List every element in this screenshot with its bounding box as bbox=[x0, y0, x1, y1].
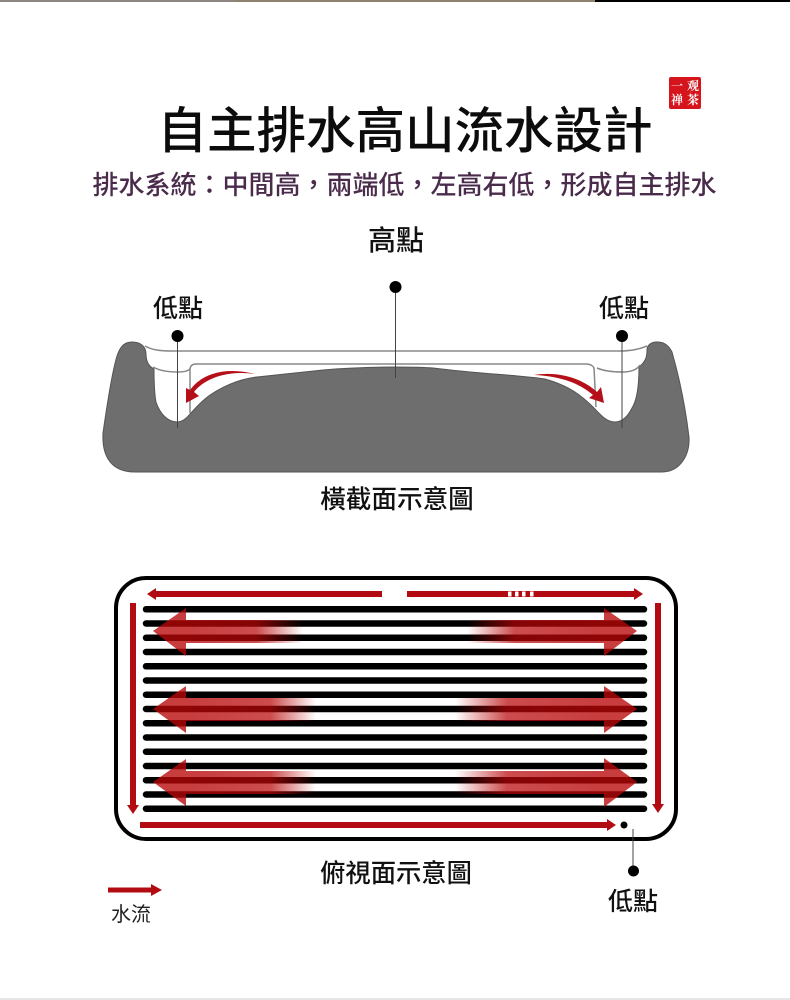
channel arrow: top right bbox=[407, 588, 643, 600]
cross-section diagram bbox=[103, 281, 689, 472]
right drain marker bbox=[616, 330, 628, 428]
channel arrow: left side bbox=[127, 603, 139, 814]
bottom edge strip bbox=[0, 998, 790, 1000]
left drain marker bbox=[172, 330, 184, 428]
wide arrows pointing right bbox=[455, 608, 637, 807]
seal stamp: 茶 bbox=[687, 91, 699, 108]
high point marker bbox=[390, 281, 402, 378]
top view diagram bbox=[116, 578, 676, 839]
subtitle: 排水系統：中間高，兩端低，左高右低，形成自主排水 bbox=[92, 170, 717, 200]
channel arrow: right side bbox=[652, 603, 664, 813]
seal stamp: 禅 bbox=[671, 91, 683, 108]
label: high point: 高點 bbox=[368, 225, 424, 256]
channel arrow: bottom bbox=[140, 819, 616, 831]
label: left low point: 低點 bbox=[153, 295, 203, 323]
channel arrow: top left bbox=[147, 588, 382, 600]
seal stamp bbox=[669, 77, 701, 109]
tray body bbox=[103, 342, 689, 472]
drain hole bbox=[620, 822, 628, 828]
label: bottom low point: 低點 bbox=[608, 888, 658, 916]
wide arrows pointing left bbox=[153, 608, 316, 806]
caption: cross section: 橫截面示意圖 bbox=[320, 485, 474, 514]
title: 自主排水高山流水設計 bbox=[158, 104, 652, 159]
top edge strip bbox=[0, 0, 790, 2]
seal stamp: 一 bbox=[671, 77, 683, 94]
seal stamp: 观 bbox=[687, 77, 699, 94]
tray outline bbox=[116, 578, 676, 839]
low point callout line bbox=[628, 829, 639, 876]
right water arrow bbox=[534, 374, 604, 403]
legend: water flow: 水流 bbox=[111, 903, 151, 926]
drainage slats bbox=[146, 609, 644, 809]
legend: water flow bbox=[108, 884, 162, 926]
left water arrow bbox=[186, 371, 255, 403]
label: right low point: 低點 bbox=[599, 295, 649, 323]
caption: top view: 俯視面示意圖 bbox=[320, 860, 472, 888]
rim and basin lines bbox=[145, 346, 647, 351]
